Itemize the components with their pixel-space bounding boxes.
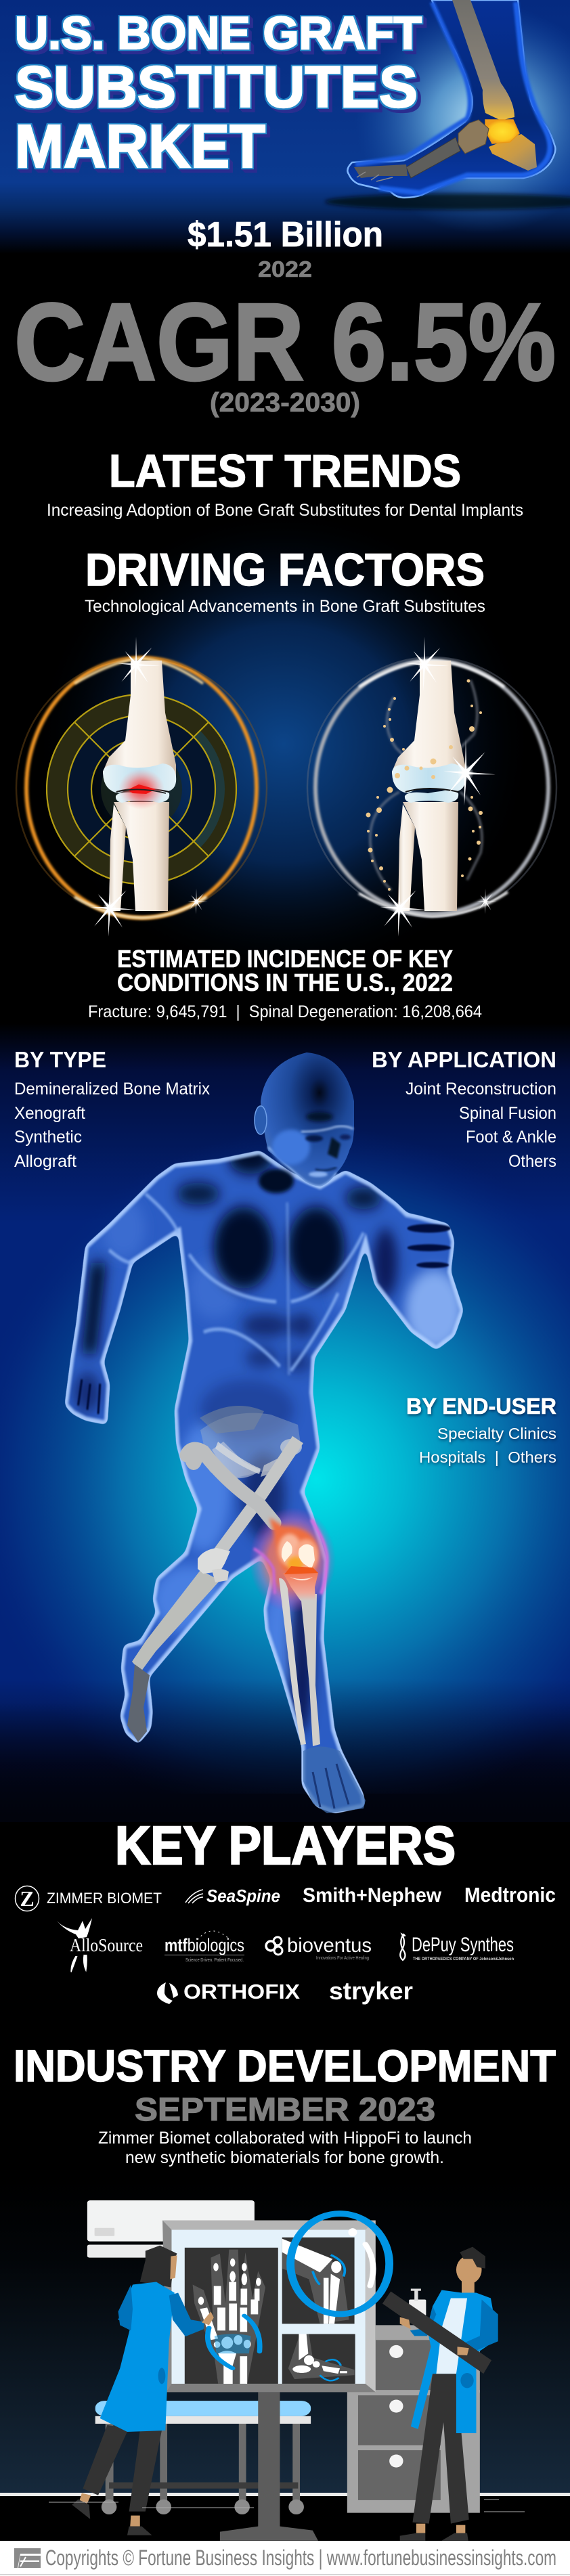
logo: SeaSpine: SeaSpine [206, 1886, 280, 1906]
panel: by type: Synthetic [14, 1128, 82, 1147]
logo: bioventus [266, 1934, 372, 1961]
heading: latest trends: LATEST TRENDS [109, 445, 461, 497]
magnifying glass lens [290, 2214, 389, 2314]
panel: by type: Allograft [14, 1152, 76, 1171]
panel: by type: Demineralized Bone Matrix [14, 1080, 210, 1098]
logo: DePuy Synthes: THE ORTHOPAEDICS COMPANY OF Johnson&Johnson [413, 1957, 514, 1961]
sparkles [91, 637, 208, 937]
panel: segmentation background [0, 1023, 570, 1822]
panel: driving factors glow [33, 507, 534, 981]
leg bones [127, 1440, 320, 1746]
logo: mtf biologics: mtfbiologics [165, 1935, 244, 1955]
CAGR period: (2023-2030) [210, 388, 360, 418]
icon: injured knee in orange ring [16, 637, 267, 937]
icon: running body with highlighted knee [37, 1052, 509, 1842]
panel: by end-user: BY END-USER [406, 1394, 556, 1419]
icon: foot x-ray illustration [325, 0, 570, 234]
cabinet [347, 2288, 480, 2513]
development description: new synthetic biomaterials for bone growth. [125, 2148, 444, 2167]
knee joint [269, 1517, 318, 1601]
panel: by type: BY TYPE [14, 1047, 106, 1072]
development date: SEPTEMBER 2023 [135, 2092, 435, 2128]
panel: footer [0, 2541, 570, 2576]
logo: AlloSource: AlloSource [70, 1935, 143, 1955]
logo: mtf biologics [165, 1931, 244, 1963]
doctor hands [400, 2317, 469, 2355]
x-ray board [162, 2221, 376, 2392]
logo: Zimmer Biomet: Z [20, 1886, 35, 1911]
heading: estimated incidence [117, 945, 453, 996]
logo: Stryker: stryker [329, 1977, 413, 2005]
healed knee bones [392, 661, 465, 911]
panel: by end-user [406, 1394, 556, 1466]
driving factors text: Technological Advancements in Bone Graft Substitutes [85, 597, 485, 616]
x-ray: knee [282, 2239, 349, 2324]
magnifying glass handle [382, 2291, 491, 2374]
logo: DePuy Synthes [400, 1934, 514, 1961]
heading: key players: KEY PLAYERS [115, 1815, 456, 1875]
logo: Zimmer Biomet: ZIMMER BIOMET [47, 1890, 162, 1907]
development description: Zimmer Biomet collaborated with HippoFi to launch [98, 2129, 472, 2148]
title: MARKET [15, 113, 265, 181]
title [15, 7, 422, 181]
development description [98, 2129, 472, 2167]
knee bones [103, 661, 176, 911]
target rings [47, 694, 236, 884]
market size year: 2022 [258, 257, 312, 282]
panel: by end-user: Specialty Clinics [437, 1425, 556, 1442]
title: SUBSTITUTES [15, 55, 418, 120]
logo: Zimmer Biomet [15, 1886, 162, 1911]
logo: Fortune Business Insights [14, 2548, 41, 2568]
body silhouette [65, 1151, 463, 1814]
panel: by application: Spinal Fusion [459, 1104, 556, 1123]
panel: by end-user: Hospitals | Others [419, 1448, 556, 1466]
bed [95, 2401, 311, 2514]
title: U.S. BONE GRAFT [15, 7, 422, 59]
market size value: $1.51 Billion [188, 215, 383, 254]
head [255, 1052, 354, 1193]
foot [303, 1746, 366, 1813]
latest trends text: Increasing Adoption of Bone Graft Substitutes for Dental Implants [47, 501, 523, 520]
logo: mtf biologics: Science Driven. Patient Focused. [185, 1957, 244, 1963]
knee glow [249, 1507, 336, 1613]
logo: bioventus: bioventus [287, 1934, 372, 1957]
icon: healed knee in white ring [307, 637, 556, 937]
panel: by application: Others [508, 1152, 556, 1171]
stand [220, 2392, 318, 2541]
pelvis and skeleton ghost [200, 1406, 302, 1479]
air conditioner [87, 2200, 255, 2258]
left doctor [72, 2246, 214, 2535]
panel: by application [372, 1047, 556, 1171]
panel: by application: Joint Reconstruction [405, 1080, 556, 1098]
sparkle swirls [370, 680, 482, 890]
golden particles [366, 680, 483, 891]
logo: Smith+Nephew: Smith+Nephew [303, 1884, 442, 1907]
panel: by type: Xenograft [14, 1104, 85, 1123]
logo: Medtronic: Medtronic [464, 1883, 556, 1907]
panel: by type [14, 1047, 210, 1171]
panel: by application: Foot & Ankle [466, 1128, 556, 1147]
logo: Orthofix: ORTHOFIX [183, 1980, 300, 2003]
panel: by application: BY APPLICATION [372, 1047, 556, 1072]
heading: driving factors: DRIVING FACTORS [85, 544, 485, 596]
incidence figures: Fracture: 9,645,791 | Spinal Degeneration: 16,208,664 [88, 1002, 482, 1021]
logo: DePuy Synthes: DePuy Synthes [412, 1934, 514, 1956]
sparkles [380, 637, 497, 937]
logo: bioventus: Innovations For Active Healing [316, 1956, 369, 1961]
logo: AlloSource [57, 1918, 143, 1972]
heading: estimated incidence: CONDITIONS IN THE U.S., 2022 [117, 969, 453, 996]
fracture highlight [116, 769, 166, 809]
right doctor [400, 2247, 498, 2541]
panel: x-ray room illustration [0, 2179, 570, 2541]
panel: header banner [0, 0, 570, 254]
x-ray: hand [193, 2250, 265, 2384]
x-ray: foot [288, 2334, 355, 2380]
heading: estimated incidence: ESTIMATED INCIDENCE OF KEY [117, 945, 453, 973]
